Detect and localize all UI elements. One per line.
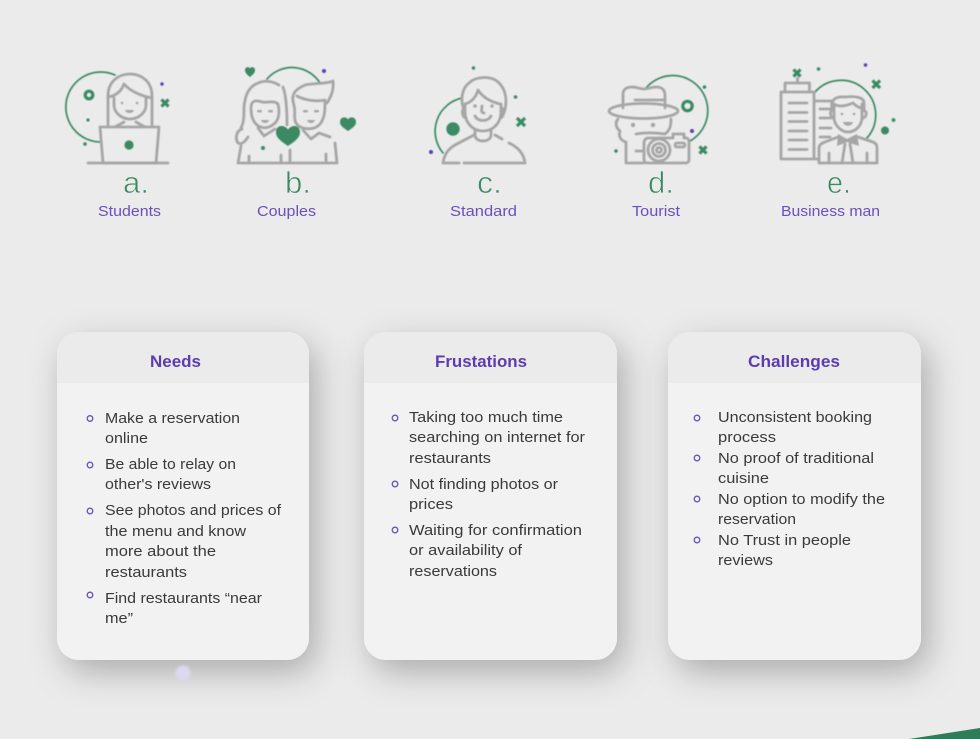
heading: challenges: Challenges [748, 353, 840, 371]
list: challenges items: cuisine [718, 470, 769, 487]
letter c: c. [477, 165, 502, 200]
list: frustations items [392, 409, 585, 580]
decorative lilac dot [176, 666, 190, 680]
letter a: a. [123, 165, 149, 200]
persona c: standard [429, 66, 525, 220]
list: needs items: more about the [105, 543, 216, 560]
persona b: couples [236, 67, 356, 220]
icon: student with laptop [66, 72, 168, 163]
list: needs items [87, 410, 282, 627]
panel: needs [57, 332, 309, 660]
list: challenges items: process [718, 429, 776, 446]
list: needs items: restaurants [105, 564, 187, 581]
corner: green wedge [909, 728, 980, 739]
list: needs items: Make a reservation [105, 410, 240, 427]
list: challenges items: No proof of traditional [718, 450, 874, 467]
label: Standard: Standard [450, 204, 517, 220]
heading: needs: Needs [150, 353, 201, 371]
list: frustations items: reservations [409, 563, 497, 580]
heading: frustations: Frustations [435, 353, 527, 371]
list: frustations items: Waiting for confirmation [409, 522, 582, 539]
letter d: d. [648, 165, 674, 200]
list: frustations items: or availability of [409, 542, 523, 559]
label: Tourist: Tourist [632, 204, 680, 220]
persona d: tourist [609, 76, 708, 220]
list: frustations items: Not finding photos or [409, 476, 558, 493]
persona a: students [66, 72, 168, 220]
label: Couples: Couples [257, 204, 316, 220]
icon: couple with hearts [236, 67, 356, 163]
list: needs items: Find restaurants “near [105, 590, 262, 607]
list: frustations items: searching on internet for [409, 429, 585, 446]
list: frustations items: prices [409, 496, 453, 513]
persona e: business man [781, 63, 895, 220]
letter b: b. [285, 165, 311, 200]
list: frustations items: Taking too much time [409, 409, 563, 426]
icon: standard person [429, 66, 525, 163]
list: needs items: Be able to relay on [105, 456, 236, 473]
list: challenges items: reservation [718, 511, 796, 528]
label: Business man: Business man [781, 204, 880, 220]
list: challenges items: Unconsistent booking [718, 409, 872, 426]
label: Students: Students [98, 204, 161, 220]
list: needs items: me” [105, 610, 133, 627]
list: frustations items: restaurants [409, 450, 491, 467]
letter e: e. [827, 165, 851, 200]
list: challenges items [694, 409, 885, 569]
list: needs items: See photos and prices of [105, 502, 282, 519]
list: challenges items: No Trust in people [718, 532, 851, 549]
panel: frustations [364, 332, 617, 660]
icon: business man with towers [781, 63, 895, 163]
panel: challenges [668, 332, 921, 660]
list: needs items: the menu and know [105, 523, 246, 540]
icon: tourist with hat and camera [609, 76, 708, 163]
list: needs items: online [105, 430, 148, 447]
list: challenges items: reviews [718, 552, 773, 569]
list: needs items: other's reviews [105, 476, 211, 493]
list: challenges items: No option to modify the [718, 491, 885, 508]
